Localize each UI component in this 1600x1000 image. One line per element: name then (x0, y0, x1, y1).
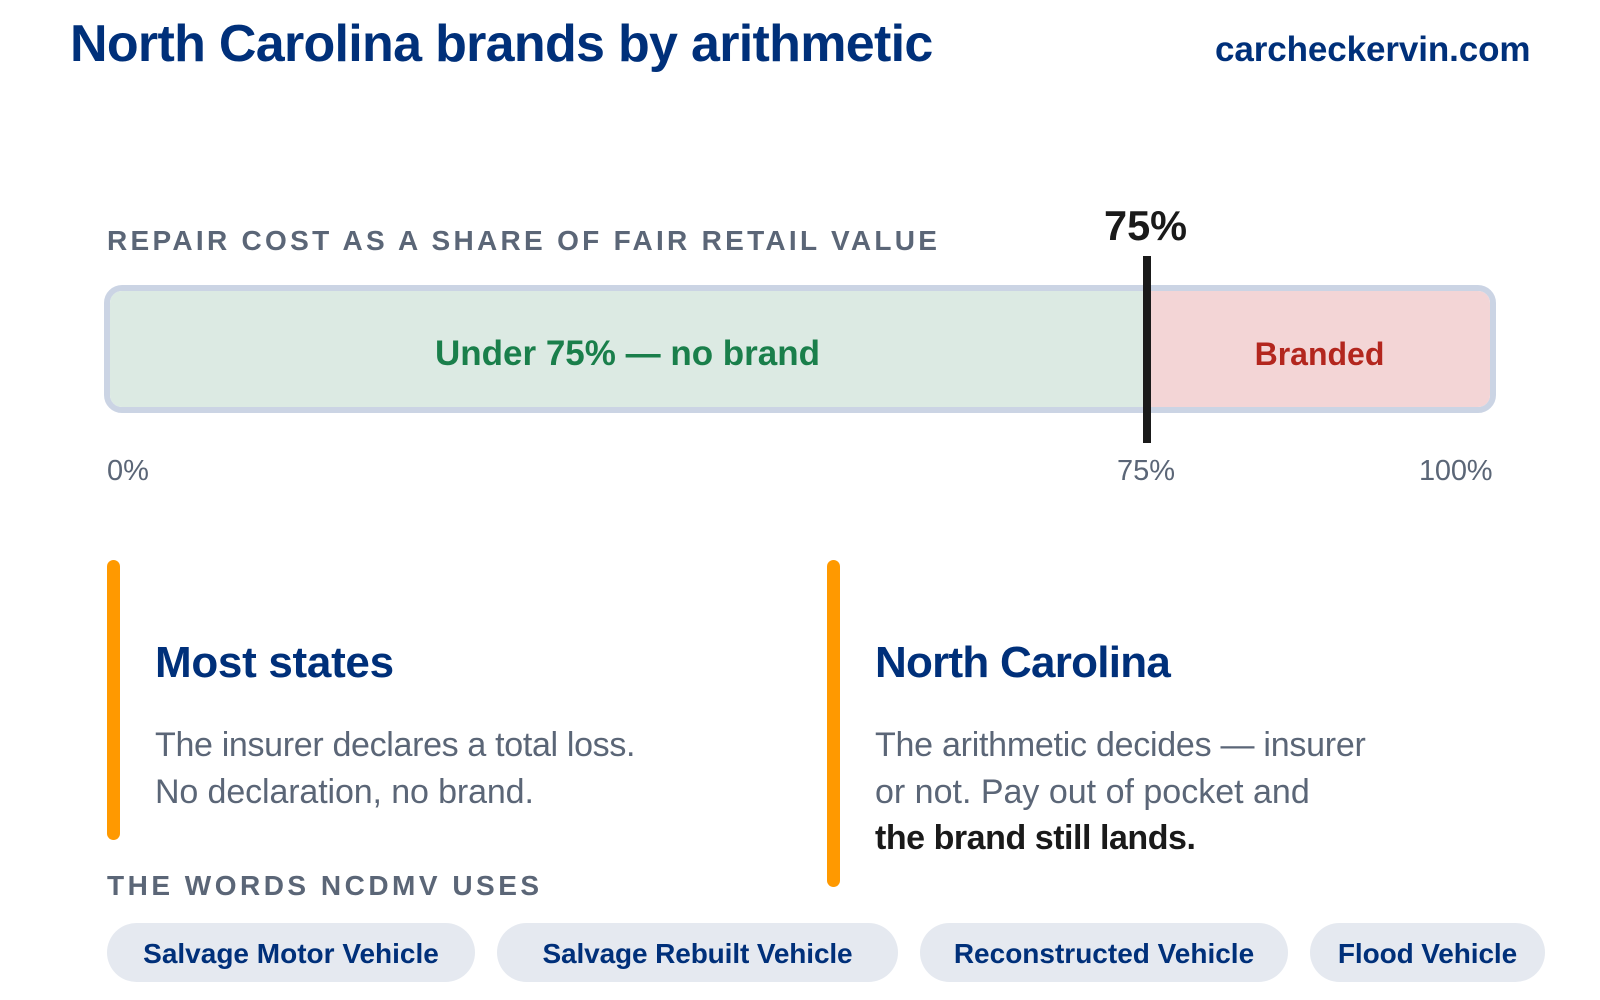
threshold value label: 75% (1104, 202, 1187, 249)
under threshold zone (110, 291, 1149, 407)
pill: reconstructed vehicle (920, 923, 1288, 982)
pill: salvage rebuilt vehicle (497, 923, 898, 982)
panel: north carolina (827, 560, 1366, 887)
title: North Carolina brands by arithmetic (70, 15, 933, 73)
threshold chart (104, 202, 1496, 487)
tick 75%: 75% (1117, 455, 1175, 487)
panel body: or not. Pay out of pocket and (875, 772, 1310, 810)
panel heading: North Carolina (875, 638, 1170, 687)
pill: salvage motor vehicle: Salvage Motor Vehicle (143, 938, 439, 969)
gauge bar (104, 285, 1496, 413)
accent bar (827, 560, 840, 887)
pill: flood vehicle (1310, 923, 1545, 982)
words heading: THE WORDS NCDMV USES (107, 870, 543, 901)
panel body (875, 726, 1366, 857)
branded zone: Branded (1255, 336, 1384, 372)
panel: most states (107, 560, 635, 840)
branded zone (1149, 291, 1490, 407)
pill: salvage rebuilt vehicle: Salvage Rebuilt Vehicle (542, 938, 853, 969)
panel body: The insurer declares a total loss. (155, 726, 635, 764)
chart heading: REPAIR COST AS A SHARE OF FAIR RETAIL VALUE (107, 225, 940, 256)
panel body: the brand still lands. (875, 819, 1195, 857)
pill: reconstructed vehicle: Reconstructed Vehicle (954, 938, 1254, 969)
panel heading: Most states (155, 638, 394, 687)
term pills (107, 923, 1545, 982)
panel body (155, 726, 635, 810)
under threshold zone: Under 75% — no brand (435, 334, 820, 373)
tick 0%: 0% (107, 455, 149, 487)
panel body: The arithmetic decides — insurer (875, 726, 1366, 764)
accent bar (107, 560, 120, 840)
tick 100%: 100% (1419, 455, 1492, 487)
threshold marker (1143, 256, 1151, 443)
site name: carcheckervin.com (1215, 30, 1530, 69)
pill: salvage motor vehicle (107, 923, 475, 982)
pill: flood vehicle: Flood Vehicle (1338, 938, 1517, 969)
panel body: No declaration, no brand. (155, 772, 534, 810)
